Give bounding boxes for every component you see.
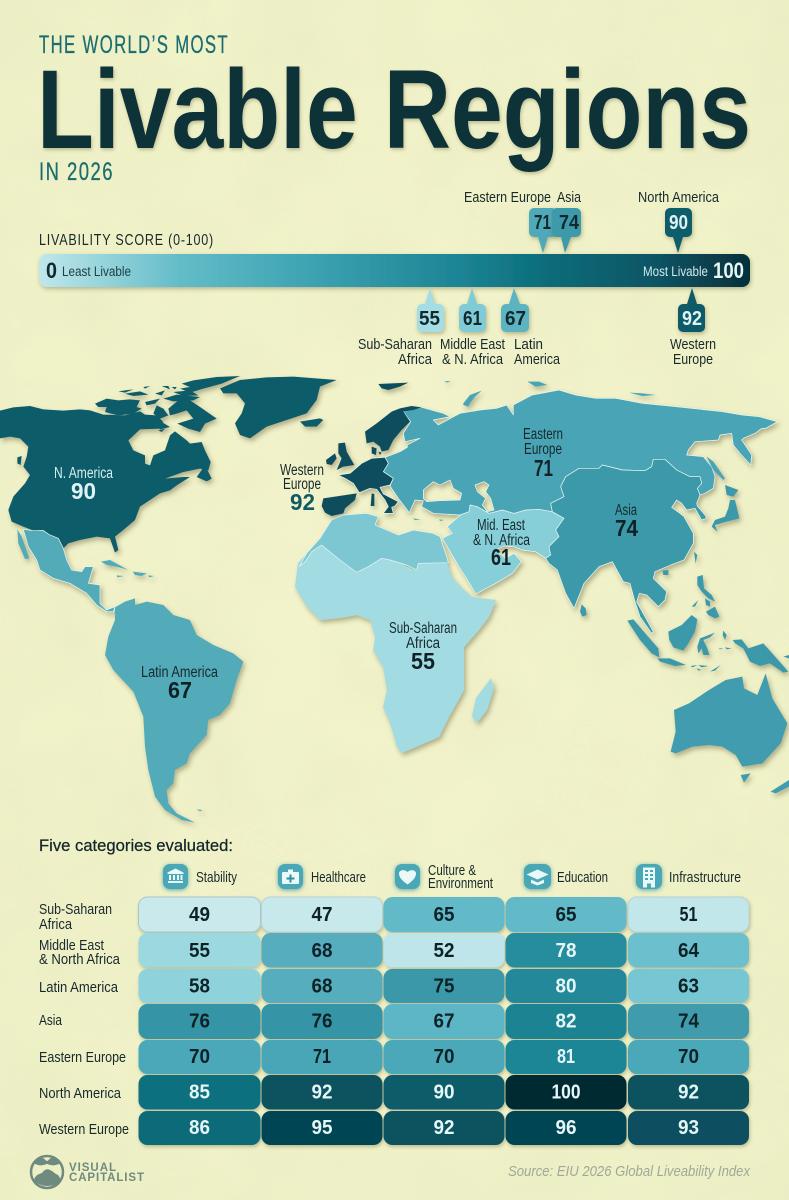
region: oceania bbox=[671, 673, 789, 793]
logo: visual capitalist: VISUAL bbox=[69, 1162, 116, 1174]
marker: latin america 67: 67 bbox=[505, 308, 526, 330]
label: middle east and north africa: & N. Africa bbox=[473, 532, 530, 549]
scale maximum: 100 bbox=[713, 258, 744, 283]
marker: middle east and north africa 61: & N. Africa bbox=[442, 351, 504, 368]
label: sub-saharan africa bbox=[389, 620, 457, 674]
label: latin america bbox=[141, 664, 218, 703]
region: mexico, central america and caribbean bbox=[17, 529, 154, 612]
scale minimum: 0 bbox=[46, 258, 57, 283]
row: north america: 85 bbox=[189, 1082, 210, 1104]
marker: middle east and north africa 61: 61 bbox=[463, 308, 482, 330]
region: sub-saharan africa bbox=[295, 545, 496, 753]
row: asia: 67 bbox=[434, 1010, 454, 1032]
label: eastern europe: Eastern bbox=[523, 426, 563, 443]
label: sub-saharan africa: Sub-Saharan bbox=[389, 620, 457, 637]
row: sub-saharan africa: 65 bbox=[434, 904, 454, 926]
row: western europe: 86 bbox=[189, 1117, 210, 1139]
row: western europe: 95 bbox=[312, 1117, 332, 1139]
marker: latin america 67 bbox=[501, 288, 561, 368]
row: sub-saharan africa: 47 bbox=[312, 904, 332, 926]
table row labels: Africa bbox=[39, 916, 73, 933]
marker: middle east and north africa 61: Middle East bbox=[440, 336, 506, 353]
row: western europe: 92 bbox=[434, 1117, 454, 1139]
label: north america: N. America bbox=[54, 465, 113, 482]
category: culture and environment: Environment bbox=[428, 875, 494, 892]
categories heading: Five categories evaluated: bbox=[39, 837, 233, 855]
region: middle east bbox=[442, 505, 564, 594]
row: asia bbox=[138, 1004, 749, 1039]
label: latin america: 67 bbox=[168, 677, 192, 703]
table row labels: & North Africa bbox=[39, 951, 121, 968]
row: middle east and north africa: 68 bbox=[312, 940, 332, 962]
category: stability bbox=[163, 864, 237, 889]
marker: sub-saharan africa 55 bbox=[358, 288, 444, 368]
category: education bbox=[524, 864, 608, 889]
row: north america: 92 bbox=[312, 1082, 332, 1104]
scale minimum: Least Livable bbox=[62, 264, 131, 279]
row: western europe: 96 bbox=[556, 1117, 576, 1139]
marker: latin america 67: Latin bbox=[514, 336, 543, 353]
source note: Source: EIU 2026 Global Liveability Index bbox=[508, 1163, 750, 1180]
row: north america: 100 bbox=[552, 1082, 580, 1104]
region: western europe bbox=[322, 383, 422, 516]
marker: eastern europe 71 bbox=[464, 189, 557, 253]
logo mark bbox=[31, 1156, 63, 1188]
label: sub-saharan africa: Africa bbox=[406, 635, 440, 652]
row: north america: 90 bbox=[434, 1082, 454, 1104]
label: middle east and north africa: Mid. East bbox=[477, 517, 526, 534]
row: western europe: 93 bbox=[678, 1117, 699, 1139]
region: north america bbox=[0, 376, 337, 553]
row: latin america bbox=[138, 969, 749, 1003]
label: north america bbox=[54, 465, 113, 504]
row: eastern europe: 81 bbox=[557, 1046, 575, 1068]
category: healthcare: Healthcare bbox=[311, 869, 366, 886]
marker: western europe 92: 92 bbox=[682, 308, 702, 330]
row: sub-saharan africa: 51 bbox=[680, 904, 698, 926]
label: western europe bbox=[280, 462, 324, 515]
score table bbox=[138, 897, 749, 1145]
region: north africa bbox=[299, 513, 448, 572]
label: eastern europe bbox=[523, 426, 563, 481]
table row labels: Sub-Saharan bbox=[39, 901, 112, 918]
marker: western europe 92: Europe bbox=[673, 351, 713, 368]
row: latin america: 58 bbox=[189, 976, 210, 998]
row: latin america: 80 bbox=[556, 976, 576, 998]
title bbox=[37, 31, 751, 186]
marker: asia 74: Asia bbox=[557, 189, 582, 206]
label: latin america: Latin America bbox=[141, 664, 218, 681]
row: asia: 82 bbox=[556, 1010, 576, 1032]
logo: visual capitalist bbox=[31, 1156, 144, 1188]
scale maximum: Most Livable bbox=[643, 264, 708, 279]
table row labels bbox=[39, 901, 129, 1138]
row: eastern europe bbox=[138, 1040, 749, 1074]
row: middle east and north africa bbox=[138, 933, 749, 968]
label: middle east and north africa: 61 bbox=[491, 544, 511, 570]
scale heading: LIVABILITY SCORE (0-100) bbox=[39, 232, 214, 249]
region: latin america bbox=[105, 598, 243, 823]
label: sub-saharan africa: 55 bbox=[411, 648, 435, 674]
marker: north america 90: 90 bbox=[669, 212, 688, 234]
row: north america bbox=[138, 1075, 749, 1110]
label: asia bbox=[615, 502, 638, 541]
category: stability: Stability bbox=[196, 869, 237, 886]
marker: asia 74: 74 bbox=[559, 212, 580, 234]
category: culture and environment: Culture & bbox=[428, 862, 476, 879]
row: middle east and north africa: 52 bbox=[434, 940, 454, 962]
marker: north america 90: North America bbox=[638, 189, 720, 206]
row: eastern europe: 70 bbox=[434, 1046, 454, 1068]
table row labels: Latin America bbox=[39, 979, 119, 996]
row: eastern europe: 71 bbox=[313, 1046, 331, 1068]
marker: north america 90 bbox=[638, 189, 720, 253]
label: western europe: 92 bbox=[290, 489, 315, 515]
marker: sub-saharan africa 55: Sub-Saharan bbox=[358, 336, 432, 353]
row: eastern europe: 70 bbox=[678, 1046, 699, 1068]
label: north america: 90 bbox=[71, 478, 96, 504]
table row labels: Western Europe bbox=[39, 1121, 129, 1138]
world map bbox=[0, 376, 789, 823]
category: healthcare bbox=[278, 864, 366, 889]
category: culture and environment bbox=[395, 862, 494, 892]
row: middle east and north africa: 64 bbox=[678, 940, 700, 962]
row: sub-saharan africa: 49 bbox=[189, 904, 210, 926]
row: sub-saharan africa: 65 bbox=[556, 904, 576, 926]
row: eastern europe: 70 bbox=[189, 1046, 210, 1068]
row: latin america: 75 bbox=[434, 976, 454, 998]
year line: IN 2026 bbox=[39, 158, 114, 186]
marker: latin america 67: America bbox=[514, 351, 561, 368]
marker: western europe 92: Western bbox=[670, 336, 716, 353]
label: asia: Asia bbox=[615, 502, 637, 519]
row: middle east and north africa: 55 bbox=[189, 940, 210, 962]
table row labels: Eastern Europe bbox=[39, 1049, 126, 1066]
marker: eastern europe 71: Eastern Europe bbox=[464, 189, 551, 206]
table header: categories bbox=[163, 862, 741, 892]
label: western europe: Europe bbox=[283, 476, 321, 493]
label: middle east and north africa bbox=[473, 517, 530, 570]
scale minimum bbox=[46, 258, 131, 283]
category: education: Education bbox=[557, 869, 608, 886]
marker: eastern europe 71: 71 bbox=[534, 212, 551, 234]
row: asia: 74 bbox=[678, 1010, 700, 1032]
row: asia: 76 bbox=[189, 1010, 210, 1032]
table row labels: Middle East bbox=[39, 937, 105, 954]
livability score scale bbox=[39, 189, 750, 368]
logo: visual capitalist: CAPITALIST bbox=[69, 1172, 144, 1184]
row: asia: 76 bbox=[312, 1010, 332, 1032]
label: asia: 74 bbox=[615, 515, 638, 541]
row: western europe bbox=[138, 1111, 749, 1145]
category: infrastructure bbox=[636, 864, 741, 889]
label: eastern europe: 71 bbox=[534, 455, 553, 481]
marker: middle east and north africa 61 bbox=[440, 288, 506, 368]
table row labels: North America bbox=[39, 1085, 122, 1102]
table row labels: Asia bbox=[39, 1012, 63, 1029]
row: sub-saharan africa bbox=[138, 897, 749, 932]
marker: sub-saharan africa 55: Africa bbox=[398, 351, 433, 368]
label: eastern europe: Europe bbox=[524, 441, 562, 458]
marker: western europe 92 bbox=[670, 288, 716, 368]
marker: asia 74 bbox=[552, 189, 582, 253]
row: latin america: 63 bbox=[678, 976, 699, 998]
gradient bar bbox=[39, 254, 750, 287]
region: eastern europe and russia bbox=[383, 381, 777, 515]
row: middle east and north africa: 78 bbox=[556, 940, 576, 962]
marker: sub-saharan africa 55: 55 bbox=[419, 308, 440, 330]
label: western europe: Western bbox=[280, 462, 324, 479]
eyebrow: the world's most: THE WORLD’S MOST bbox=[39, 31, 229, 59]
scale maximum bbox=[643, 258, 744, 283]
category: infrastructure: Infrastructure bbox=[669, 869, 741, 886]
row: north america: 92 bbox=[678, 1082, 699, 1104]
region: asia bbox=[546, 459, 789, 673]
map labels bbox=[54, 426, 638, 703]
row: latin america: 68 bbox=[312, 976, 332, 998]
